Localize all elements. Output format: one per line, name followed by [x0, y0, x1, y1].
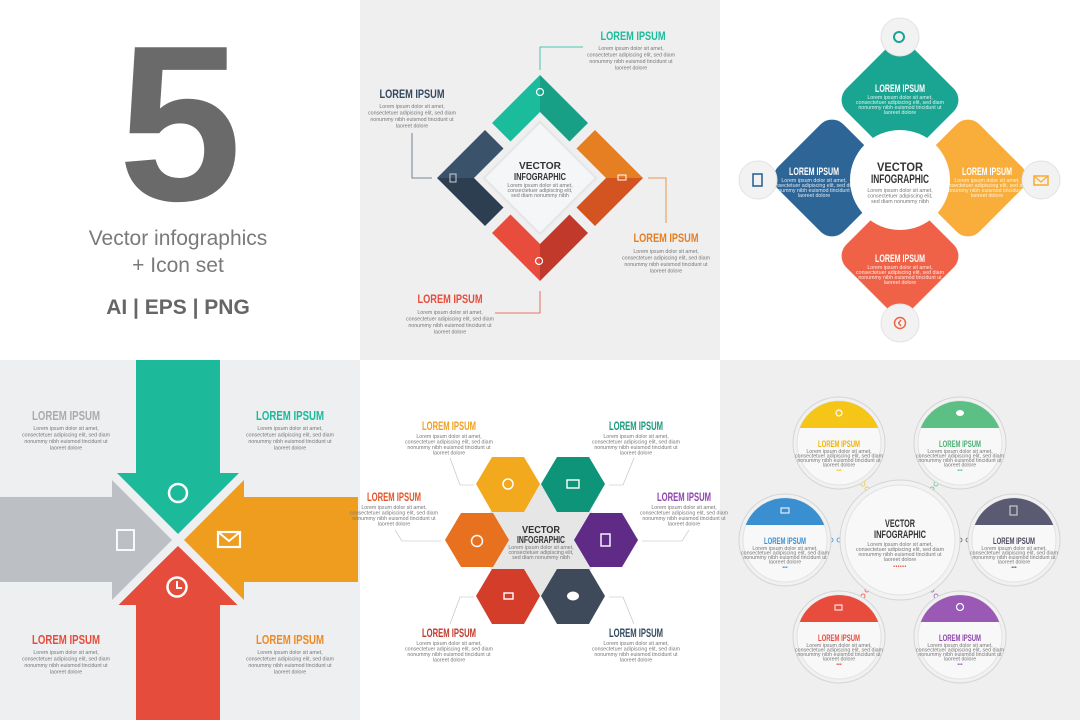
text: slate: laoreet dolore — [620, 658, 652, 664]
diamond: red: nonummy nibh euismod tincidunt ut — [858, 275, 942, 281]
leader lines — [412, 47, 666, 313]
center circle: VECTOR — [877, 160, 923, 174]
text: red: LOREM IPSUM — [32, 632, 100, 647]
circle: purple — [914, 591, 1006, 683]
text: navy: consectetuer adipiscing elit, sed diam — [368, 110, 457, 116]
text: slate: nonummy nibh euismod tincidunt ut — [594, 652, 678, 658]
icon: clock — [168, 578, 186, 596]
text: orange: consectetuer adipiscing elit, sed diam — [246, 656, 335, 662]
diamond: orange — [903, 113, 1033, 243]
text: red: laoreet dolore — [50, 670, 82, 676]
text: navy: laoreet dolore — [396, 124, 428, 130]
center circle: •••••• — [893, 564, 907, 570]
circle: red: consectetuer adipiscing elit, sed diam — [795, 648, 884, 654]
diamond: teal: LOREM IPSUM — [875, 83, 925, 95]
icon: calculator — [739, 161, 777, 199]
circle: slate: consectetuer adipiscing elit, sed diam — [970, 550, 1059, 556]
text: teal: consectetuer adipiscing elit, sed diam — [592, 440, 681, 446]
text: green: laoreet dolore — [615, 66, 647, 72]
formats: AI | EPS | PNG — [106, 296, 250, 319]
hex: teal — [541, 457, 605, 512]
text: red: nonummy nibh euismod tincidunt ut — [24, 663, 108, 669]
icon: document — [450, 174, 456, 182]
text: red: Lorem ipsum dolor sit amet, — [416, 641, 482, 647]
hex: red — [476, 569, 540, 624]
text: yellow-orange: Lorem ipsum dolor sit amet, — [416, 434, 482, 440]
icon: mail — [1022, 161, 1060, 199]
panel: cover title — [89, 0, 267, 319]
center text: VECTOR — [522, 525, 561, 536]
panel: rounded diamonds — [739, 18, 1060, 342]
diamond: teal — [835, 35, 965, 165]
circle: blue: ••• — [782, 565, 788, 571]
text: red: nonummy nibh euismod tincidunt ut — [408, 323, 492, 329]
text: green: consectetuer adipiscing elit, sed diam — [587, 52, 676, 58]
center circle: INFOGRAPHIC — [874, 529, 926, 541]
circle: yellow: nonummy nibh euismod tincidunt ut — [797, 458, 881, 464]
text: orange: Lorem ipsum dolor sit amet, — [633, 249, 699, 255]
circle: green: LOREM IPSUM — [939, 439, 981, 449]
chevron: red — [492, 214, 588, 281]
circle: yellow: LOREM IPSUM — [818, 439, 860, 449]
text: green: laoreet dolore — [274, 446, 306, 452]
circle: green: ••• — [957, 468, 963, 474]
diamond: red: laoreet dolore — [884, 280, 916, 286]
text: teal: nonummy nibh euismod tincidunt ut — [594, 445, 678, 451]
circle: red: Lorem ipsum dolor sit amet, — [806, 643, 872, 649]
center hexagon — [473, 484, 609, 596]
diamond: orange: nonummy nibh euismod tincidunt ut — [945, 188, 1029, 194]
text: purple: nonummy nibh euismod tincidunt ut — [642, 516, 726, 522]
text: grey: Lorem ipsum dolor sit amet, — [33, 426, 99, 432]
circle: slate: ••• — [1011, 565, 1017, 571]
center text: consectetuer adipiscing elit, — [508, 550, 574, 556]
text: yellow-orange: laoreet dolore — [433, 450, 465, 456]
center diamond: consectetuer adipiscing elit, — [507, 188, 573, 194]
diamond: blue: laoreet dolore — [798, 193, 830, 199]
circle: yellow: Lorem ipsum dolor sit amet, — [806, 449, 872, 455]
hex: purple — [574, 513, 638, 567]
center circle: consectetuer adipiscing elit, sed diam — [856, 547, 945, 553]
text: orange: laoreet dolore — [274, 670, 306, 676]
icon: back arrow — [881, 304, 919, 342]
center text: INFOGRAPHIC — [517, 535, 565, 546]
text: green: nonummy nibh euismod tincidunt ut — [248, 439, 332, 445]
arrow: red up — [117, 546, 239, 720]
text: yellow-orange: nonummy nibh euismod tincidunt ut — [407, 445, 491, 451]
text: navy: LOREM IPSUM — [380, 87, 444, 101]
panel: circles — [739, 397, 1060, 683]
text: red: laoreet dolore — [434, 330, 466, 336]
text: green: nonummy nibh euismod tincidunt ut — [589, 59, 673, 65]
circle: blue: laoreet dolore — [769, 560, 801, 566]
circle: yellow: laoreet dolore — [823, 462, 855, 468]
circle: purple: laoreet dolore — [944, 656, 976, 662]
diamond: red — [835, 191, 965, 321]
leader lines — [395, 458, 689, 624]
diamond: teal: laoreet dolore — [884, 110, 916, 116]
diamond: blue: nonummy nibh euismod tincidunt ut — [772, 188, 856, 194]
circle: purple: Lorem ipsum dolor sit amet, — [927, 643, 993, 649]
center diamond: INFOGRAPHIC — [514, 172, 566, 183]
text: purple: laoreet dolore — [668, 522, 700, 528]
circle: purple: ••• — [957, 662, 963, 668]
center circle: Lorem ipsum dolor sit amet, — [867, 188, 933, 194]
center circle: consectetuer adipiscing elit, — [867, 194, 933, 200]
text: red: consectetuer adipiscing elit, sed diam — [405, 646, 494, 652]
text: slate: LOREM IPSUM — [609, 628, 663, 640]
text: grey: consectetuer adipiscing elit, sed diam — [22, 432, 111, 438]
icon: globe — [881, 18, 919, 56]
chevron: navy — [437, 130, 504, 226]
text: red — [22, 632, 111, 676]
panel: hexagons — [350, 421, 729, 664]
text: red: consectetuer adipiscing elit, sed diam — [22, 656, 111, 662]
text: green: consectetuer adipiscing elit, sed diam — [246, 432, 335, 438]
text: orange — [622, 231, 711, 274]
circle: red: laoreet dolore — [823, 656, 855, 662]
diamond: red: consectetuer adipiscing elit, sed diam — [856, 270, 945, 276]
text: green — [246, 408, 335, 452]
text: purple: Lorem ipsum dolor sit amet, — [651, 505, 717, 511]
text: orange — [350, 492, 439, 528]
icon: globe — [169, 484, 187, 502]
circle: red: nonummy nibh euismod tincidunt ut — [797, 652, 881, 658]
diamond: blue — [767, 113, 897, 243]
connectors — [829, 482, 970, 598]
text: red: nonummy nibh euismod tincidunt ut — [407, 652, 491, 658]
text: orange: LOREM IPSUM — [256, 632, 324, 647]
text: orange: laoreet dolore — [650, 268, 682, 274]
text: yellow-orange — [405, 421, 494, 456]
circle: yellow: ••• — [836, 468, 842, 474]
circle: blue — [739, 494, 831, 586]
diamond: orange: Lorem ipsum dolor sit amet, — [954, 178, 1020, 184]
circle: slate — [968, 494, 1060, 586]
circle: blue: LOREM IPSUM — [764, 536, 806, 546]
text: green: Lorem ipsum dolor sit amet, — [598, 46, 664, 52]
diamond: red: Lorem ipsum dolor sit amet, — [867, 265, 933, 271]
text: orange: LOREM IPSUM — [634, 231, 698, 245]
text: purple — [640, 492, 729, 528]
text: purple: consectetuer adipiscing elit, sed diam — [640, 510, 729, 516]
text: orange: Lorem ipsum dolor sit amet, — [257, 650, 323, 656]
text: green — [587, 29, 676, 72]
circle: blue: consectetuer adipiscing elit, sed diam — [741, 550, 830, 556]
circle: green: Lorem ipsum dolor sit amet, — [927, 449, 993, 455]
panel: diamond chevrons — [368, 29, 711, 336]
text: orange: Lorem ipsum dolor sit amet, — [361, 505, 427, 511]
diamond: orange: LOREM IPSUM — [962, 166, 1012, 178]
center diamond: Lorem ipsum dolor sit amet, — [507, 183, 573, 189]
circle: slate: laoreet dolore — [998, 560, 1030, 566]
text: orange: consectetuer adipiscing elit, sed diam — [350, 510, 439, 516]
text: yellow-orange: consectetuer adipiscing elit, sed diam — [405, 440, 494, 446]
chevron: orange — [576, 130, 643, 226]
center text: Lorem ipsum dolor sit amet, — [508, 545, 574, 551]
text: green: LOREM IPSUM — [256, 408, 324, 423]
arrow: green down — [117, 360, 239, 534]
icon: clock — [536, 258, 542, 264]
center text — [508, 525, 574, 561]
big number 5: 5 — [118, 0, 242, 248]
center circle: INFOGRAPHIC — [871, 172, 929, 186]
text: red: Lorem ipsum dolor sit amet, — [417, 310, 483, 316]
center circle: laoreet dolore — [884, 557, 916, 563]
subtitle: Vector infographics — [89, 227, 267, 250]
text: red — [405, 628, 494, 664]
diamond: orange: laoreet dolore — [971, 193, 1003, 199]
panel: arrows — [0, 360, 358, 720]
diamond: orange: consectetuer adipiscing elit, sed diam — [943, 183, 1032, 189]
text: grey: laoreet dolore — [50, 446, 82, 452]
text: navy — [368, 87, 457, 130]
center circle: VECTOR — [885, 518, 915, 530]
center circle: sed diam nonummy nibh — [871, 199, 929, 205]
separators — [112, 476, 244, 608]
arrow: orange left — [184, 480, 358, 600]
text: orange: LOREM IPSUM — [367, 492, 421, 504]
text: teal: LOREM IPSUM — [609, 421, 663, 433]
panel: cover title: + Icon set — [132, 254, 224, 277]
diamond: blue: consectetuer adipiscing elit, sed diam — [770, 183, 859, 189]
circle: red — [793, 591, 885, 683]
circle: purple: nonummy nibh euismod tincidunt ut — [918, 652, 1002, 658]
hex: yellow-orange — [476, 457, 540, 512]
circle: green: consectetuer adipiscing elit, sed diam — [916, 454, 1005, 460]
icon: mail — [618, 175, 626, 180]
text: orange: consectetuer adipiscing elit, sed diam — [622, 256, 711, 262]
text: red: consectetuer adipiscing elit, sed diam — [406, 316, 495, 322]
circle: yellow: consectetuer adipiscing elit, sed diam — [795, 454, 884, 460]
circle: green: laoreet dolore — [944, 462, 976, 468]
text: red: LOREM IPSUM — [418, 292, 482, 306]
diamond: teal: nonummy nibh euismod tincidunt ut — [858, 105, 942, 111]
arrow: grey right — [0, 480, 172, 600]
circle: slate: nonummy nibh euismod tincidunt ut — [972, 555, 1056, 561]
circle: slate: Lorem ipsum dolor sit amet, — [981, 546, 1047, 552]
hex: dark slate — [541, 569, 605, 624]
hex: orange — [445, 513, 509, 567]
text: orange: nonummy nibh euismod tincidunt ut — [352, 516, 436, 522]
text: red: LOREM IPSUM — [422, 628, 476, 640]
text: slate — [592, 628, 681, 664]
center diamond: sed diam nonummy nibh — [511, 193, 569, 199]
center circle — [850, 130, 950, 230]
diamond: blue: Lorem ipsum dolor sit amet, — [781, 178, 847, 184]
diamond: teal: consectetuer adipiscing elit, sed diam — [856, 100, 945, 106]
diamond: teal: Lorem ipsum dolor sit amet, — [867, 95, 933, 101]
chevron: green — [492, 75, 588, 142]
text: grey — [22, 408, 111, 452]
text: green: LOREM IPSUM — [600, 29, 666, 43]
text: orange — [246, 632, 335, 676]
center text: sed diam nonummy nibh — [512, 555, 570, 561]
text: green: Lorem ipsum dolor sit amet, — [257, 426, 323, 432]
text: orange: nonummy nibh euismod tincidunt ut — [624, 262, 708, 268]
center diamond — [484, 122, 596, 234]
circle: blue: Lorem ipsum dolor sit amet, — [752, 546, 818, 552]
text: orange: laoreet dolore — [378, 522, 410, 528]
circle: slate: LOREM IPSUM — [993, 536, 1035, 546]
text: orange: nonummy nibh euismod tincidunt ut — [248, 663, 332, 669]
circle: green — [914, 397, 1006, 489]
circle: green: nonummy nibh euismod tincidunt ut — [918, 458, 1002, 464]
text: grey: LOREM IPSUM — [32, 408, 100, 423]
text: teal: Lorem ipsum dolor sit amet, — [603, 434, 669, 440]
diamond: blue: LOREM IPSUM — [789, 166, 839, 178]
circle: yellow — [793, 397, 885, 489]
text: red — [406, 292, 495, 336]
center circle: nonummy nibh euismod tincidunt ut — [858, 552, 942, 558]
text: red: laoreet dolore — [433, 658, 465, 664]
text: slate: Lorem ipsum dolor sit amet, — [603, 641, 669, 647]
center diamond: VECTOR — [519, 161, 562, 172]
circle: purple: LOREM IPSUM — [939, 633, 981, 643]
center circle — [840, 480, 960, 600]
text: slate: consectetuer adipiscing elit, sed diam — [592, 646, 681, 652]
text: navy: nonummy nibh euismod tincidunt ut — [370, 117, 454, 123]
icon: calculator — [117, 530, 134, 550]
text: teal — [592, 421, 681, 456]
circle: blue: nonummy nibh euismod tincidunt ut — [743, 555, 827, 561]
text: red: Lorem ipsum dolor sit amet, — [33, 650, 99, 656]
text: grey: nonummy nibh euismod tincidunt ut — [24, 439, 108, 445]
icon: mail — [218, 532, 240, 547]
text: yellow-orange: LOREM IPSUM — [422, 421, 476, 433]
circle: purple: consectetuer adipiscing elit, sed diam — [916, 648, 1005, 654]
circle: red: ••• — [836, 662, 842, 668]
text: purple: LOREM IPSUM — [657, 492, 711, 504]
center circle: Lorem ipsum dolor sit amet, — [867, 542, 933, 548]
diamond: red: LOREM IPSUM — [875, 253, 925, 265]
text: teal: laoreet dolore — [620, 450, 652, 456]
circle: red: LOREM IPSUM — [818, 633, 860, 643]
text: navy: Lorem ipsum dolor sit amet, — [379, 104, 445, 110]
